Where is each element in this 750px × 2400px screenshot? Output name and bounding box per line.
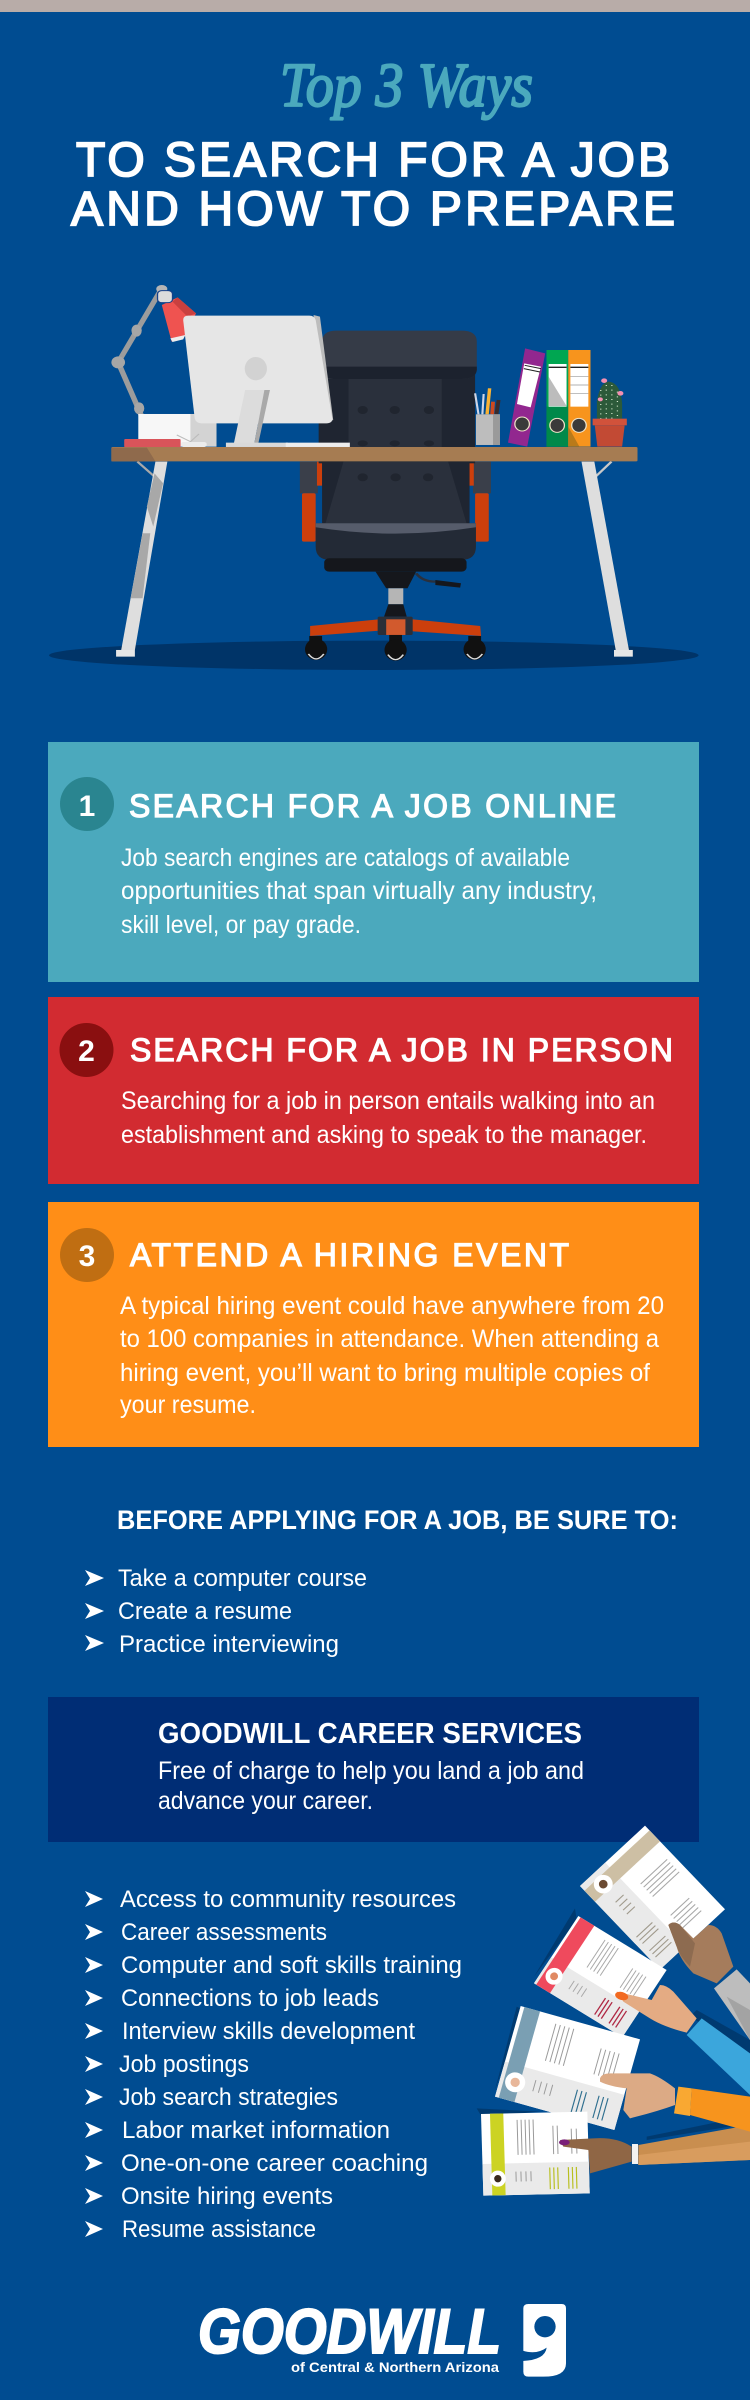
panel: career services (48, 1697, 699, 1842)
checklist: before applying (85, 1565, 367, 1658)
illustration: office desk with chair (49, 285, 699, 670)
service arrows (85, 1891, 103, 2237)
body 1 (121, 844, 597, 939)
desk legs (116, 462, 633, 657)
cactus pot (593, 378, 627, 447)
tan hand (600, 2073, 675, 2118)
list text: Create a resume (118, 1598, 292, 1625)
illustration: hands holding resumes (477, 1826, 750, 2196)
title (71, 52, 675, 236)
body 2: Searching for a job in person entails walking into an (121, 1087, 655, 1115)
career services body: advance your career. (158, 1787, 373, 1815)
title main lines: TO SEARCH FOR A JOB (76, 134, 670, 187)
title main lines (71, 134, 675, 236)
title script line: Top 3 Ways (280, 52, 533, 120)
service text: Job search strategies (119, 2084, 338, 2111)
number badge 3: 3 (79, 1240, 95, 1273)
gray sleeve (714, 1969, 750, 2040)
resume 1 (580, 1826, 725, 1970)
logo: Goodwill (198, 2297, 566, 2377)
number badge 1: 1 (79, 790, 95, 823)
resume 3 (495, 2006, 640, 2130)
list arrows (85, 1570, 104, 1651)
body 2: establishment and asking to speak to the manager. (121, 1121, 647, 1149)
service text: Computer and soft skills training (121, 1952, 462, 1979)
panel: search online (48, 742, 699, 982)
panel: hiring event (48, 1202, 699, 1447)
list text (118, 1565, 367, 1658)
service text: Interview skills development (122, 2018, 415, 2045)
service text: Connections to job leads (121, 1985, 379, 2012)
desk lamp (111, 285, 196, 440)
desk top (111, 447, 638, 461)
body 1: Job search engines are catalogs of available (121, 844, 570, 872)
body 3 (120, 1292, 664, 1419)
binders (508, 348, 590, 447)
heading 1: SEARCH FOR A JOB ONLINE (129, 788, 616, 824)
number badge 1 (60, 777, 114, 831)
service text: Labor market information (122, 2117, 390, 2144)
logo g mark (523, 2304, 566, 2377)
career services body: Free of charge to help you land a job and (158, 1757, 584, 1785)
number badge 3 (60, 1228, 114, 1282)
office chair (300, 331, 491, 661)
stack of papers (124, 414, 217, 447)
brown sleeve and hand (632, 2125, 750, 2165)
floor shadow (49, 641, 699, 670)
body 3: A typical hiring event could have anywhere from 20 (120, 1292, 664, 1320)
career services heading: GOODWILL CAREER SERVICES (158, 1718, 582, 1750)
service text: Job postings (119, 2051, 249, 2078)
logo wordmark: GOODWILL (198, 2297, 501, 2367)
blue sleeve (687, 2018, 750, 2095)
peach hand (614, 1985, 697, 2033)
body 2 (121, 1087, 655, 1149)
number badge 2: 2 (78, 1035, 95, 1068)
orange sleeve (674, 2087, 750, 2132)
service text: One-on-one career coaching (121, 2150, 428, 2177)
pencil cup (475, 388, 500, 445)
service text (119, 1886, 462, 2243)
body 1: opportunities that span virtually any industry, (121, 877, 597, 905)
body 3: to 100 companies in attendance. When attending a (120, 1325, 659, 1353)
gold hand (668, 1922, 733, 1983)
list text: Take a computer course (118, 1565, 367, 1592)
heading: before applying: BEFORE APPLYING FOR A JOB, BE SURE TO: (117, 1505, 678, 1535)
shadows (477, 1908, 750, 2140)
panel: search in person (48, 997, 699, 1184)
service text: Onsite hiring events (121, 2183, 333, 2210)
resume 4 (481, 2112, 590, 2196)
body 3: your resume. (120, 1391, 256, 1419)
heading 3: ATTEND A HIRING EVENT (130, 1237, 569, 1273)
number badge 2 (60, 1023, 114, 1077)
service text: Resume assistance (122, 2216, 316, 2243)
title main lines: AND HOW TO PREPARE (71, 183, 675, 236)
service text: Access to community resources (120, 1886, 456, 1913)
list text: Practice interviewing (119, 1631, 339, 1658)
computer monitor (183, 315, 350, 447)
logo tagline: of Central & Northern Arizona (291, 2359, 499, 2375)
list: services (85, 1886, 462, 2243)
service text: Career assessments (121, 1919, 327, 1946)
body 3: hiring event, you’ll want to bring multiple copies of (120, 1359, 650, 1387)
heading 2: SEARCH FOR A JOB IN PERSON (130, 1032, 673, 1068)
brown hand (559, 2138, 632, 2173)
body 1: skill level, or pay grade. (121, 911, 361, 939)
resume 2 (534, 1916, 667, 2037)
career services body (158, 1757, 584, 1815)
